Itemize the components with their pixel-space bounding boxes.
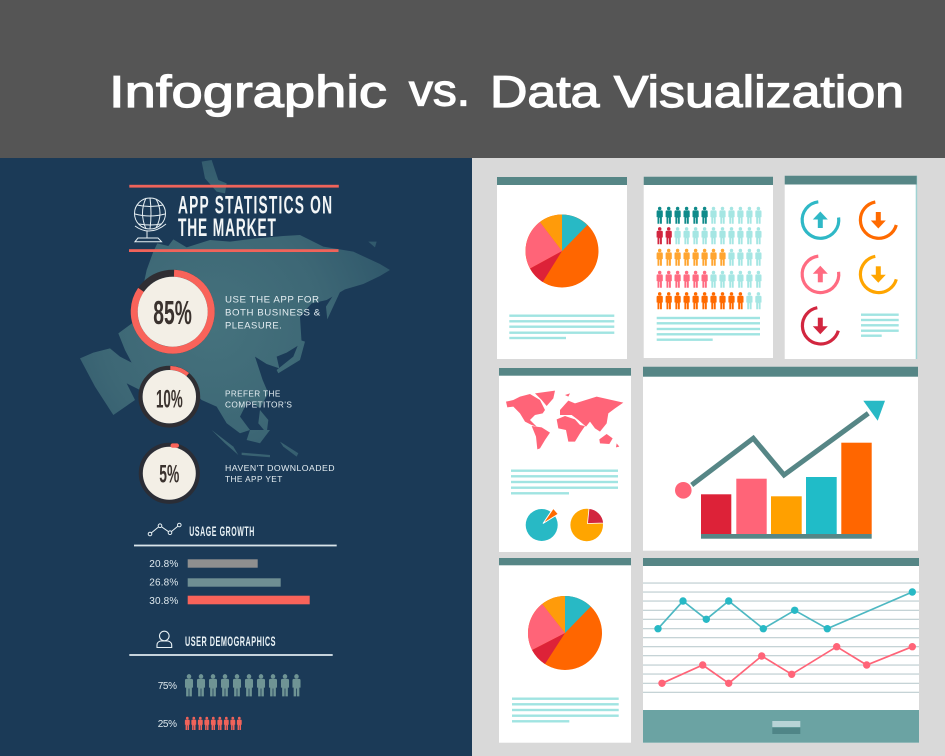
panel: world map page — [499, 368, 631, 552]
stat text: 10%: COMPETITOR'S — [225, 400, 292, 409]
panel: people pictogram page — [644, 177, 773, 358]
icon: pink up arrow — [802, 256, 839, 293]
title: Infographic: Infographic — [109, 68, 387, 117]
heading: User demographics: USER DEMOGRAPHICS — [185, 635, 275, 650]
pie chart — [526, 214, 598, 288]
stat text: 85%: PLEASURE. — [225, 321, 282, 331]
text lines — [861, 314, 899, 337]
stat: 85% donut: 85% — [153, 294, 192, 331]
bar chart — [701, 443, 872, 539]
icon: orange down arrow — [860, 202, 896, 238]
stat text: 85% — [225, 295, 321, 331]
grid lines — [643, 582, 919, 693]
heading rule top — [129, 185, 339, 188]
bar chart: usage growth: 20.8% — [149, 559, 178, 570]
icon: teal up arrow — [802, 202, 839, 238]
heading: App statistics on the market: THE MARKET — [178, 215, 276, 242]
stat text: 5% — [225, 464, 335, 484]
small pie: teal — [526, 508, 558, 541]
panel: line chart page — [643, 558, 919, 743]
pictogram row 5 — [657, 292, 762, 309]
title: vs.: vs. — [409, 66, 470, 116]
text lines — [657, 317, 760, 341]
pictogram row 3 — [657, 249, 762, 266]
heading: Usage growth: USAGE GROWTH — [189, 525, 254, 540]
trend arrow — [675, 401, 885, 499]
panel: second pie chart page — [499, 558, 631, 743]
stat: 85% donut — [133, 272, 213, 352]
bar chart: usage growth — [149, 559, 310, 607]
icon: yellow down arrow — [860, 256, 896, 293]
bar chart: usage growth: 30.8% — [149, 596, 178, 607]
pictogram row 2 — [657, 227, 762, 244]
panel: infographic example — [0, 158, 472, 756]
world map — [506, 391, 623, 449]
background map of Asia — [80, 160, 390, 457]
teal line series — [654, 588, 916, 632]
pink line series — [658, 643, 916, 687]
stat text: 5%: THE APP YET — [225, 475, 283, 484]
icon: line graph — [148, 523, 181, 536]
icon: red down arrow — [802, 308, 838, 344]
heading: App statistics on the market — [178, 192, 332, 242]
footer band with button — [643, 710, 919, 743]
small pie: yellow — [570, 508, 604, 541]
text lines — [512, 698, 619, 722]
text lines — [511, 470, 618, 494]
pie chart — [528, 596, 602, 670]
pictogram: 75% — [158, 674, 301, 696]
stat text: 10% — [225, 389, 292, 409]
pictogram: 75%: 75% — [158, 681, 177, 692]
panel: bar chart page — [643, 367, 918, 551]
heading: App statistics on the market: APP STATISTICS ON — [178, 192, 332, 220]
icon: user — [157, 631, 172, 648]
bar chart: usage growth: 26.8% — [149, 578, 178, 589]
stat text: 5%: HAVEN'T DOWNLOADED — [225, 464, 335, 473]
panel: circular arrows page — [785, 176, 917, 359]
stat text: 10%: PREFER THE — [225, 389, 281, 398]
pictogram row 1 — [657, 207, 762, 224]
stat text: 85%: BOTH BUSINESS & — [225, 308, 321, 318]
pictogram row 4 — [657, 271, 762, 288]
header band with title — [0, 0, 945, 158]
stat: 5% donut — [141, 443, 198, 502]
pictogram: 25%: 25% — [158, 719, 177, 730]
title: Data Visualization: Data Visualization — [490, 68, 904, 117]
panel: pie chart page — [497, 177, 627, 359]
icon: globe — [134, 198, 166, 242]
heading rule bottom — [129, 249, 338, 252]
stat: 5% donut: 5% — [159, 462, 179, 489]
text lines — [509, 314, 614, 339]
pictogram: 25% — [158, 717, 242, 730]
stat text: 85%: USE THE APP FOR — [225, 295, 320, 305]
stat: 10% donut: 10% — [156, 386, 183, 413]
stat: 10% donut — [140, 367, 199, 426]
